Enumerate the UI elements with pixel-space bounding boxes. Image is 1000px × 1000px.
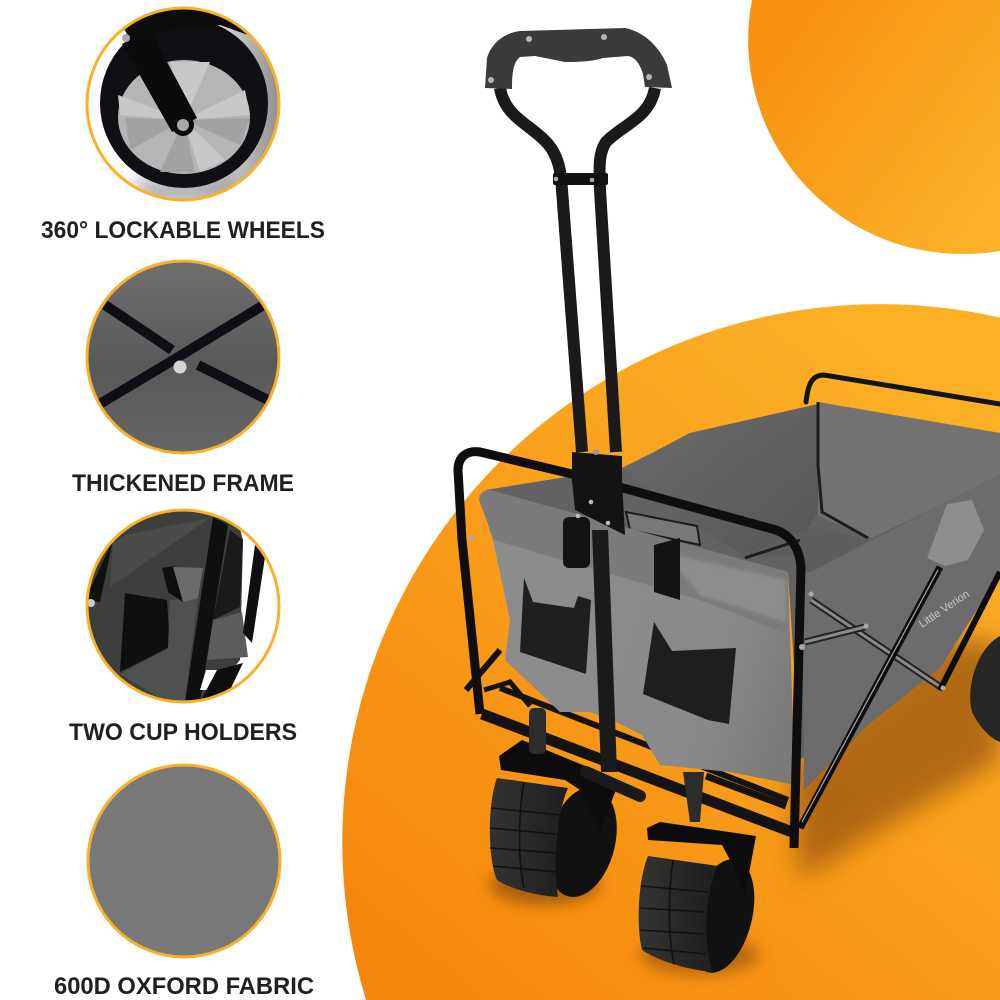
- left wheel face: [536, 780, 628, 904]
- left wheel tread: [490, 778, 568, 897]
- right caster post: [683, 772, 704, 822]
- fabric highlights: [665, 553, 786, 622]
- front fabric panel: [479, 494, 795, 785]
- inner handle strap: [626, 512, 700, 545]
- right side fabric panel: [803, 474, 1000, 790]
- front frame tube: [458, 452, 801, 848]
- left wheel: [490, 708, 628, 904]
- front top fold band: [479, 490, 788, 634]
- side braces: [800, 567, 1000, 828]
- label: thickened frame: THICKENED FRAME: [72, 470, 294, 497]
- mesh pocket right: [643, 622, 736, 724]
- left wheel housing: [499, 740, 616, 830]
- feature 2: thickened frame: [72, 261, 294, 497]
- back-left interior panel: [622, 404, 820, 556]
- left side brace stub: [466, 650, 500, 690]
- mesh pocket left: [520, 578, 591, 674]
- handle tubes: [500, 88, 655, 452]
- handle clamp: [553, 173, 608, 185]
- large orange circle: [342, 304, 1000, 1000]
- right wheel face: [679, 852, 765, 980]
- wagon illustration: [458, 28, 1000, 980]
- feature 1: lockable wheels: [41, 8, 325, 244]
- feature 3: cup holders: [69, 500, 297, 746]
- frame photo circle: [87, 261, 279, 453]
- left caster post: [529, 708, 546, 754]
- pull handle: [485, 28, 672, 452]
- back-right interior panel: [818, 402, 1000, 538]
- label: oxford fabric: 600D OXFORD FABRIC: [54, 973, 314, 1000]
- feature 4: oxford fabric: [54, 765, 314, 1000]
- cart shadow: [490, 640, 1000, 975]
- straps: [563, 517, 680, 600]
- back right wheel: [970, 636, 1000, 742]
- top-right orange circle: [748, 0, 1000, 254]
- right wheel housing: [647, 822, 756, 895]
- label: cup holders: TWO CUP HOLDERS: [69, 719, 297, 746]
- interior floor: [736, 526, 868, 574]
- right wheel: [639, 772, 765, 980]
- corner fabric flap: [927, 500, 984, 566]
- rear top rail: [806, 375, 1000, 404]
- interior base: [486, 404, 1000, 760]
- wheel photo circle: [87, 8, 279, 205]
- wagon interior: [486, 402, 1000, 760]
- cup holder photo circle: [80, 500, 279, 702]
- central handle block: [572, 449, 625, 772]
- interior seam: [745, 402, 868, 558]
- handle grip: [485, 28, 672, 89]
- grip rivets: [488, 34, 652, 83]
- central pole: [592, 530, 617, 772]
- front axle: [586, 772, 640, 796]
- fabric swatch circle: [88, 765, 280, 957]
- brand text on side: Little Verion: [917, 588, 972, 630]
- right wheel tread: [639, 856, 718, 972]
- bottom frame rails: [482, 682, 792, 832]
- frame rivets: [468, 536, 946, 690]
- label: lockable wheels: 360° LOCKABLE WHEELS: [41, 217, 325, 244]
